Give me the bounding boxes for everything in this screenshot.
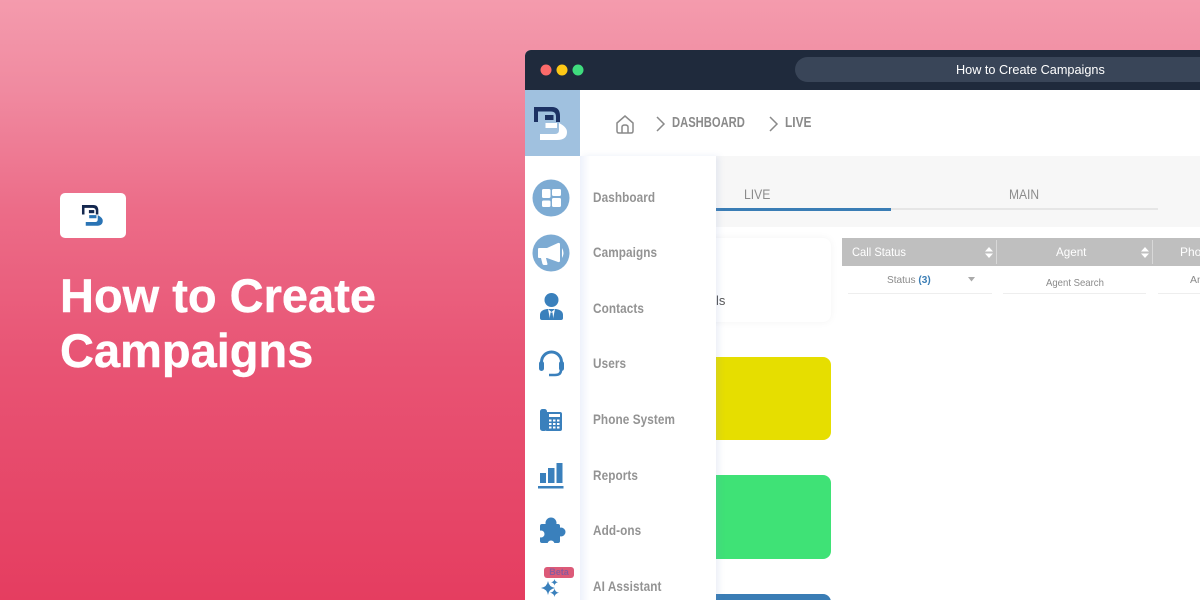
nav: campaigns: Campaigns	[593, 244, 657, 260]
nav flyout panel	[580, 156, 716, 600]
details card: ls	[716, 293, 725, 308]
blue card	[675, 594, 831, 600]
address bar	[795, 57, 1200, 82]
table header: Agent	[1056, 245, 1086, 259]
breadcrumb live: LIVE	[785, 115, 811, 131]
tab strip	[716, 156, 1200, 227]
title: Campaigns	[60, 324, 313, 377]
nav: ai assistant: AI Assistant	[593, 578, 662, 594]
icon: phone system	[540, 409, 562, 431]
sidebar logo tile	[525, 90, 580, 156]
agent search: Agent Search	[1046, 277, 1104, 289]
table header: Call Status	[852, 245, 906, 259]
details card	[675, 238, 831, 322]
yellow card	[675, 357, 831, 440]
icon: contacts	[540, 293, 563, 320]
beta badge	[544, 567, 574, 578]
nav: phone system: Phone System	[593, 411, 675, 427]
title: How to Create	[60, 269, 376, 322]
breadcrumb dashboard: DASHBOARD	[672, 115, 745, 131]
title bar	[525, 50, 1200, 90]
icon: campaigns	[532, 234, 570, 272]
nav: users: Users	[593, 355, 626, 371]
icon: reports	[538, 463, 564, 488]
table header	[842, 238, 1200, 266]
tab main: MAIN	[1009, 186, 1039, 202]
breadcrumb icons	[616, 115, 778, 134]
icon: ai assistant	[541, 579, 559, 597]
nav: dashboard: Dashboard	[593, 189, 655, 205]
nav: add-ons: Add-ons	[593, 522, 641, 538]
status filter: Status (3)	[887, 274, 931, 286]
address bar: How to Create Campaigns	[956, 63, 1105, 77]
app window	[525, 50, 1200, 600]
icon: dashboard	[532, 180, 570, 216]
logo badge	[60, 193, 126, 238]
nav: reports: Reports	[593, 467, 638, 483]
beta badge: Beta	[549, 567, 569, 577]
icon rail	[525, 156, 580, 600]
icon: add-ons	[540, 518, 566, 543]
tab live: LIVE	[744, 186, 770, 202]
filter arrow	[968, 277, 975, 282]
nav: contacts: Contacts	[593, 300, 644, 316]
title	[60, 269, 376, 378]
green card	[675, 475, 831, 559]
window controls	[540, 64, 584, 76]
icon: users	[539, 350, 564, 376]
